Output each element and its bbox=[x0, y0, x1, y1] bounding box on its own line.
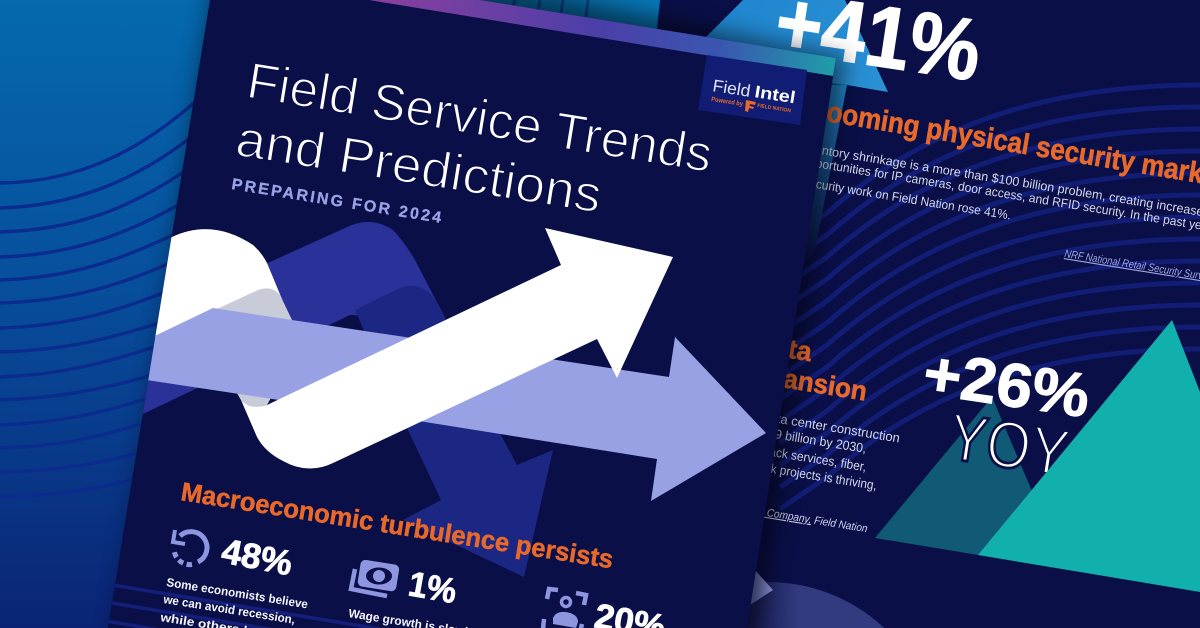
periwinkle arrow bbox=[140, 308, 766, 501]
icon: back page circle bbox=[598, 582, 938, 628]
panel: back page arcs bbox=[780, 85, 1200, 509]
heading: macroeconomic turbulence persists: Macroeconomic turbulence persists bbox=[179, 476, 615, 574]
logo: Field Intel badge bbox=[698, 55, 807, 125]
heading: data center expansion bbox=[737, 328, 869, 407]
grey overlap bbox=[218, 288, 292, 407]
text block: economists: we can avoid recession, bbox=[162, 592, 296, 627]
text block: data center paragraph: network projects is thriving, bbox=[735, 455, 878, 493]
subtitle: PREPARING FOR 2024 bbox=[230, 176, 442, 227]
icon: back page arrow tip bbox=[750, 568, 773, 605]
icon: bright teal triangle bbox=[978, 320, 1200, 592]
stat: +26% YOY bbox=[919, 339, 1094, 490]
logo: Field Intel badge: Field bbox=[711, 76, 752, 101]
text block: data center paragraph bbox=[735, 408, 901, 493]
panel: front page bbox=[100, 0, 836, 628]
title: and Predictions bbox=[232, 110, 606, 224]
gradient strip at page top bbox=[369, 0, 836, 76]
bottom stripes bbox=[100, 583, 380, 628]
icon: dark teal triangle bbox=[875, 397, 1040, 555]
stat: 1%: 1% bbox=[406, 564, 460, 611]
text block: data center paragraph: rack services, fiber, bbox=[765, 443, 868, 474]
chart: arrows illustration bbox=[120, 222, 766, 577]
title: Field Service Trends bbox=[243, 52, 716, 183]
stat: 48%: 48% bbox=[218, 532, 296, 583]
citation: McKinsey and Field Nation: McKinsey & Company, Field Nation bbox=[711, 498, 868, 535]
text block: data center paragraph: $49 billion by 2030, bbox=[761, 424, 868, 456]
down arrow bbox=[355, 286, 553, 577]
background arcs on blue panel bbox=[0, 0, 588, 497]
icon: circular arrow bbox=[173, 530, 207, 565]
white arrow bbox=[241, 228, 673, 469]
icon: blue up arrow on back page bbox=[700, 0, 888, 275]
logo: Field Intel badge: Powered by bbox=[711, 96, 744, 108]
heading: data center expansion: Data bbox=[752, 328, 815, 367]
white ribbon rear bbox=[155, 229, 284, 400]
text block: economists: Some economists believe bbox=[166, 575, 309, 611]
text block: physical security paragraph: security work on Field Nation rose 41%. bbox=[803, 175, 1012, 223]
logo: Field Intel badge: FIELD NATION bbox=[757, 103, 791, 114]
icon: face scan bbox=[543, 589, 586, 628]
heading: data center expansion: expansion bbox=[737, 356, 869, 407]
logo: Field Intel badge: Intel bbox=[753, 82, 797, 107]
front page shadow bbox=[114, 0, 846, 628]
stat: +26% YOY: +26% bbox=[919, 339, 1094, 431]
text block: economists bbox=[158, 575, 309, 628]
icon: money stack bbox=[351, 559, 400, 596]
stat: +26% YOY: YOY bbox=[944, 399, 1074, 490]
text block: data center paragraph: Data center construction bbox=[760, 408, 901, 446]
dark ribbon bbox=[142, 222, 445, 414]
